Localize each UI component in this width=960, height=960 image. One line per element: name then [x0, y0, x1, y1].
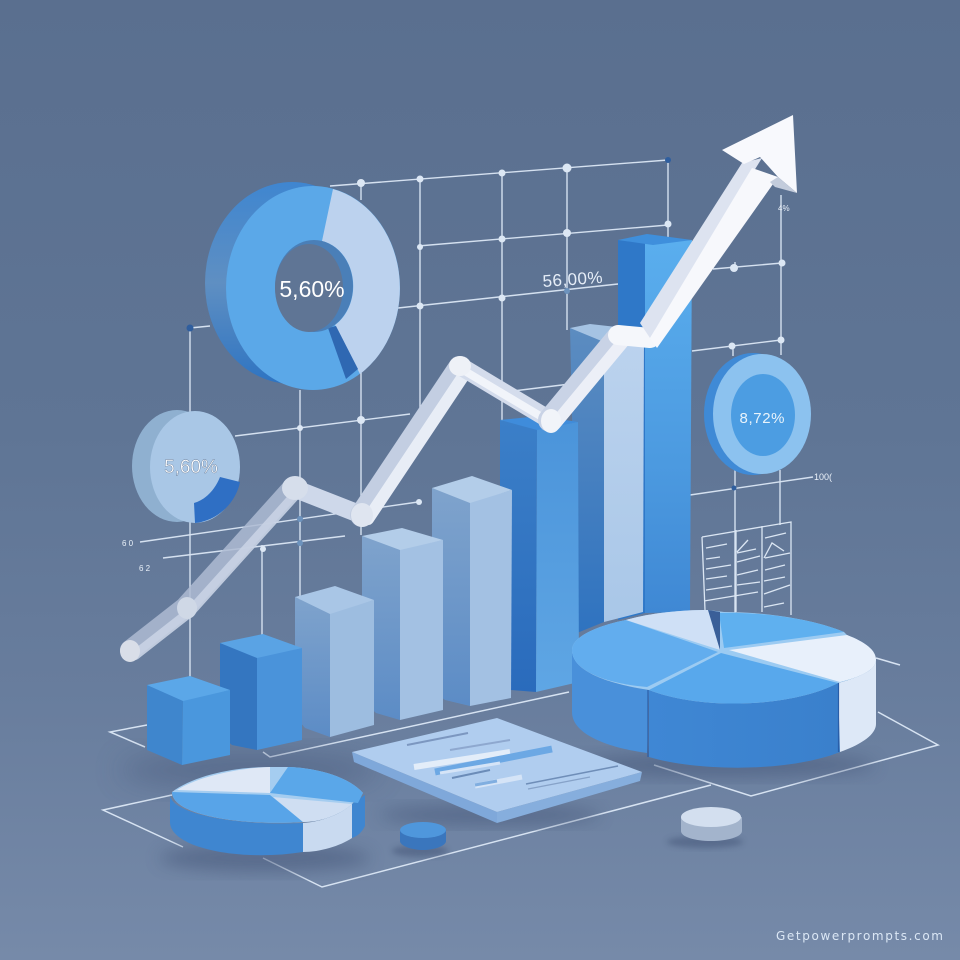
bar 1	[147, 676, 230, 765]
growth arrow	[120, 115, 797, 662]
pie chart: large	[572, 610, 876, 768]
table wireframe	[702, 522, 791, 615]
bar 8	[618, 234, 692, 620]
disc: small left	[132, 410, 240, 523]
pie top base	[572, 610, 876, 704]
bar 4	[362, 528, 443, 720]
disc value: 8,72%	[740, 410, 784, 427]
tiny labels	[122, 204, 832, 573]
bar 7	[570, 324, 644, 633]
coin: blue	[400, 822, 446, 850]
tiny labels: 6 2	[139, 564, 151, 573]
donut value: 5,60%	[279, 276, 345, 302]
arrow head	[722, 115, 797, 193]
bar 5	[432, 476, 512, 706]
bar 2	[220, 634, 302, 750]
document content	[407, 733, 618, 789]
disc: right	[704, 353, 811, 475]
value label: grid: 56,00%	[542, 268, 603, 291]
tiny labels: 4%	[778, 204, 790, 213]
bar 3	[295, 586, 374, 737]
wireframe grid	[140, 157, 813, 680]
pie top slices	[572, 620, 718, 687]
arrow shaft upper	[640, 158, 778, 348]
arrow shaft lower	[120, 335, 650, 662]
floor lines	[103, 658, 938, 887]
watermark: Getpowerprompts.com	[776, 929, 943, 943]
bar 6	[500, 416, 579, 692]
report document	[352, 718, 642, 823]
pie chart: small	[170, 767, 365, 855]
small pie top base	[172, 767, 363, 823]
tiny labels: 100(	[814, 472, 832, 482]
small pie top slices	[172, 792, 303, 823]
coin: white	[681, 807, 742, 841]
disc value: 5,60%	[164, 457, 218, 478]
donut chart: large	[205, 182, 400, 390]
floor shadows	[120, 753, 875, 872]
small pie sides	[170, 795, 303, 855]
tiny labels: 6 0	[122, 539, 134, 548]
pie sides	[572, 650, 649, 753]
